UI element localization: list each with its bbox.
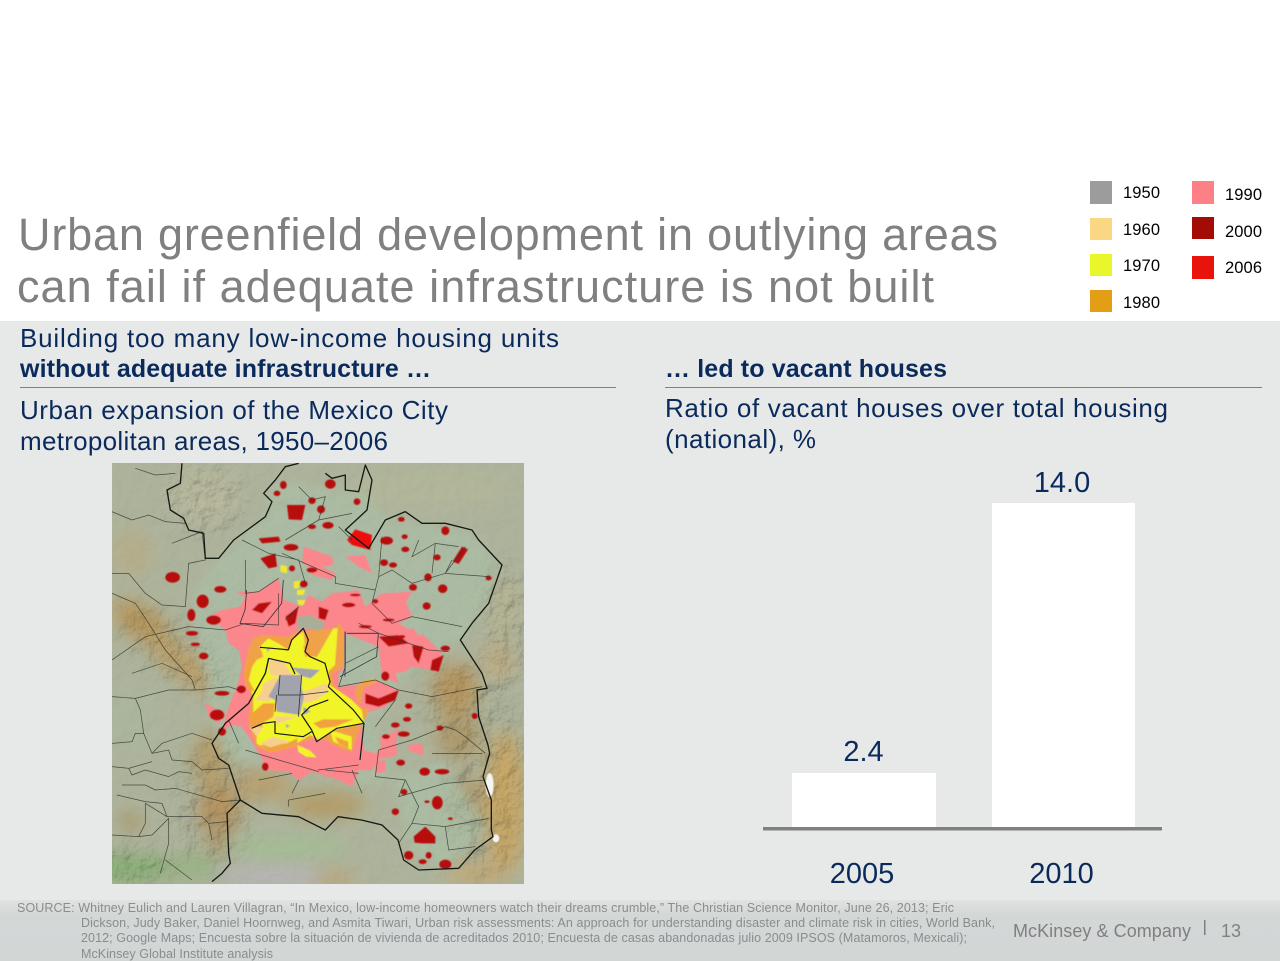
map urban areas by decade: [165, 479, 492, 869]
value 2.4: 2.4: [843, 736, 884, 768]
central boundaries: [240, 580, 378, 760]
company name and page number: McKinsey & Company: [1013, 921, 1191, 941]
1990 pink area: [209, 578, 440, 787]
inside-of-boundary valley tone: [192, 480, 499, 867]
bar 2010: [992, 503, 1135, 827]
2000 and 2006 red blobs: [165, 479, 492, 869]
left panel heading: [19, 323, 559, 383]
hillshade relief: [112, 460, 524, 885]
orange patches in yellow: [243, 635, 353, 753]
legend: map decades: 1950: [1123, 184, 1160, 202]
value 14.0: 14.0: [1034, 467, 1090, 499]
municipal boundaries, thin: [112, 468, 489, 880]
legend: map decades: 2000: [1225, 223, 1262, 241]
footer band: [0, 900, 1280, 961]
1980 orange underlay: [243, 623, 368, 759]
1990 pink mottling NE: [385, 592, 442, 673]
company name and page number: 13: [1221, 921, 1241, 941]
bar 2005: [792, 773, 936, 827]
1990 pink dark edge left: [234, 718, 250, 727]
title: can fail if adequate infrastructure is not built: [17, 261, 934, 312]
year 2010: 2010: [1029, 858, 1094, 890]
source note: SOURCE: Whitney Eulich and Lauren Villagran, “In Mexico, low-income homeowners watch their dreams crumble,” The Christian Science Monitor, June 26, 2013; Eric: [17, 901, 954, 915]
right chart subtitle: (national), %: [665, 424, 816, 454]
right chart subtitle: Ratio of vacant houses over total housing: [665, 393, 1168, 423]
year 2005: 2005: [830, 858, 894, 890]
source note: 2012; Google Maps; Encuesta sobre la situación de vivienda de acreditados 2010; Encuesta de casas abandonadas julio 2009 IPSOS (Matamoros, Mexicali);: [81, 931, 967, 945]
title: [17, 209, 998, 312]
chart baseline: [763, 827, 1162, 830]
left panel heading: without adequate infrastructure …: [19, 355, 431, 383]
left panel heading: Building too many low-income housing units: [20, 323, 559, 353]
central rings drawn at reference zoom coordinates: [228, 615, 377, 759]
1950 grey: [267, 647, 320, 728]
right chart subtitle: [665, 393, 1168, 454]
right panel heading: … led to vacant houses: [665, 355, 947, 383]
map: urban expansion of Mexico City: [92, 460, 525, 887]
1970 yellow main: [249, 628, 364, 750]
state boundaries, thick: [167, 463, 502, 882]
left chart subtitle: [20, 395, 448, 456]
left chart subtitle: Urban expansion of the Mexico City: [20, 395, 448, 425]
legend: map decades: 1960: [1123, 221, 1160, 239]
legend: map decades: 1980: [1123, 294, 1160, 312]
legend: map decades: [1090, 181, 1262, 312]
legend: map decades: 1970: [1123, 257, 1160, 275]
bar chart: vacant housing ratio: [763, 467, 1162, 890]
source note: McKinsey Global Institute analysis: [81, 947, 273, 961]
legend: map decades: 1990: [1225, 186, 1262, 204]
source note: [17, 901, 995, 961]
pink south notches: [297, 738, 342, 759]
title: Urban greenfield development in outlying areas: [18, 209, 998, 260]
map terrain: [92, 460, 525, 887]
left chart subtitle: metropolitan areas, 1950–2006: [20, 426, 388, 456]
source note: Dickson, Judy Baker, Daniel Hoornweg, and Asmita Tiwari, Urban risk assessments: An approach for understanding disaster and climate risk in cities, World Bank,: [81, 916, 995, 930]
content panel background: [0, 321, 1280, 900]
hill gap: [297, 615, 326, 631]
1960 tan: [250, 660, 328, 747]
legend: map decades: 2006: [1225, 259, 1262, 277]
